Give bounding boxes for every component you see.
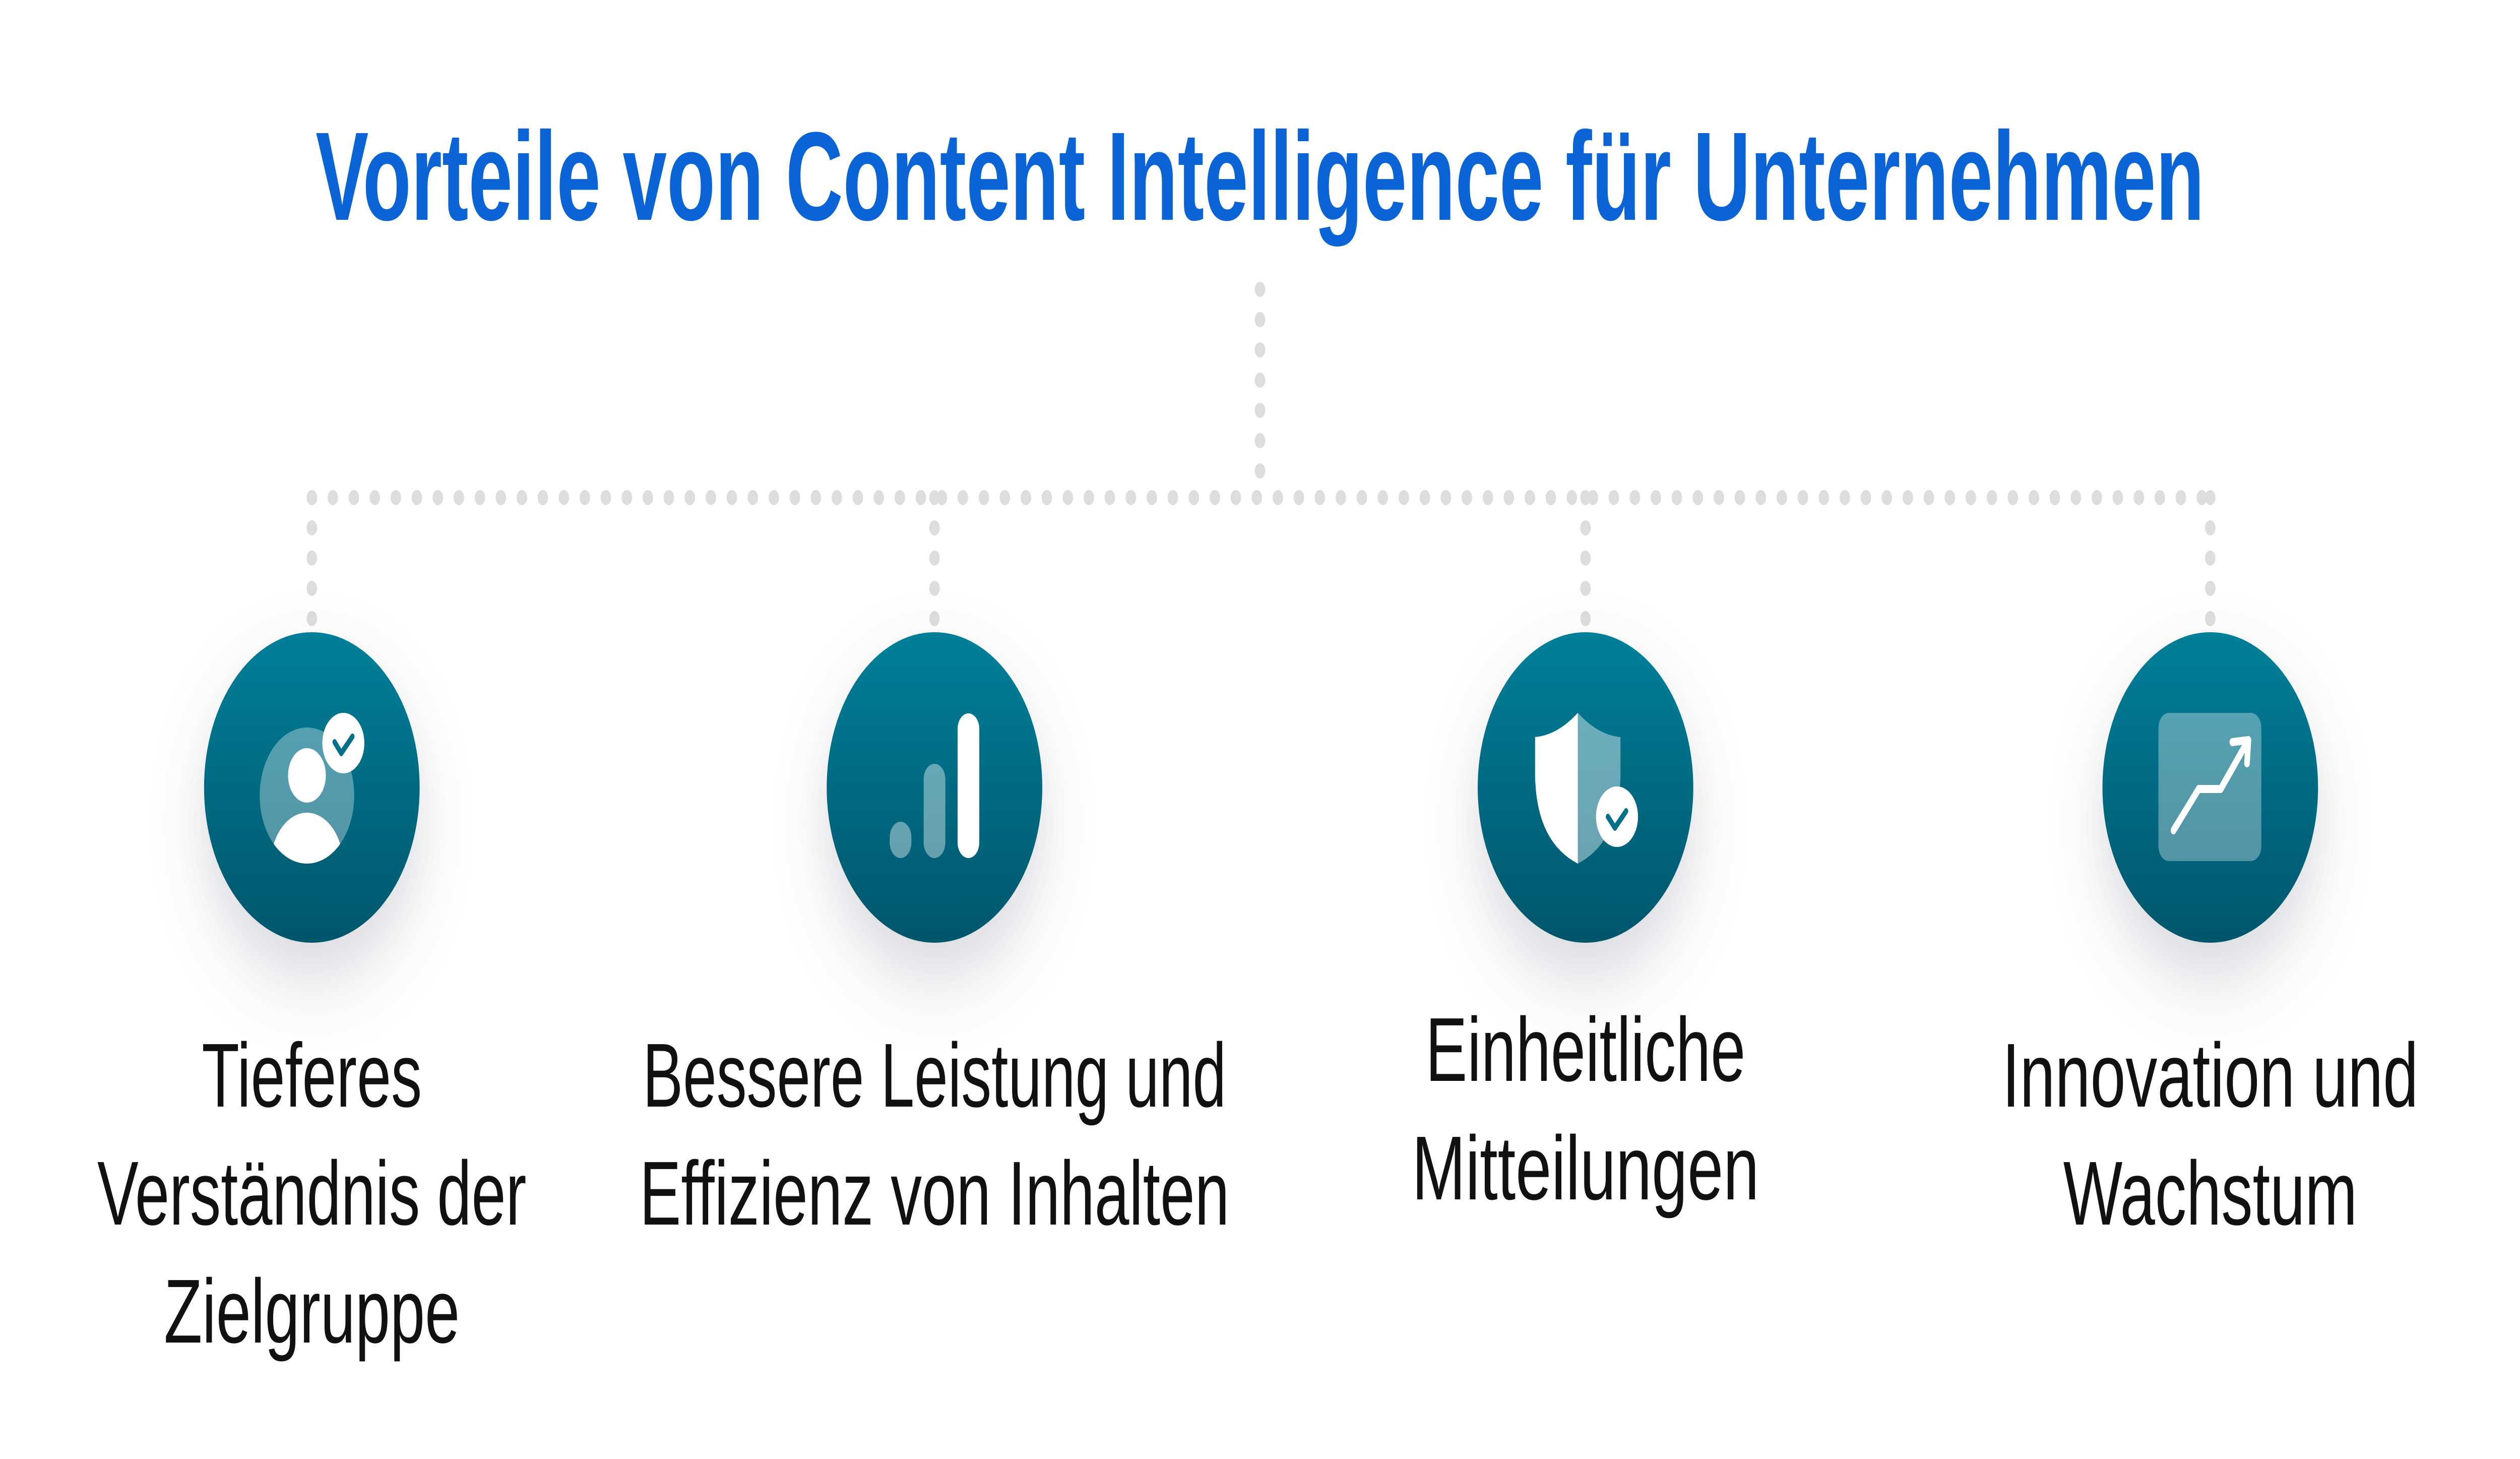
label: Einheitliche Mitteilungen: Mitteilungen bbox=[1412, 1117, 1759, 1219]
icon: audience circle bbox=[204, 632, 420, 943]
label: Bessere Leistung und Effizienz von Inhalten bbox=[640, 1024, 1229, 1244]
label: Tieferes Verständnis der Zielgruppe: Zielgruppe bbox=[164, 1260, 460, 1362]
label: Tieferes Verständnis der Zielgruppe bbox=[97, 1024, 526, 1362]
icon: shield circle bbox=[1478, 632, 1693, 943]
icon: performance bars circle bbox=[827, 632, 1042, 943]
label: Tieferes Verständnis der Zielgruppe: Tieferes bbox=[202, 1024, 422, 1126]
connector: dotted tree lines bbox=[312, 289, 2210, 630]
label: Bessere Leistung und Effizienz von Inhalten: Effizienz von Inhalten bbox=[640, 1142, 1229, 1244]
title: Vorteile von Content Intelligence für Unternehmen bbox=[316, 105, 2204, 247]
label: Tieferes Verständnis der Zielgruppe: Verständnis der bbox=[97, 1142, 526, 1244]
label: Innovation und Wachstum: Innovation und bbox=[2002, 1024, 2418, 1126]
label: Einheitliche Mitteilungen bbox=[1412, 999, 1759, 1219]
icon: growth chart circle bbox=[2103, 632, 2318, 943]
label: Bessere Leistung und Effizienz von Inhalten: Bessere Leistung und bbox=[643, 1024, 1226, 1126]
label: Innovation und Wachstum bbox=[2002, 1024, 2418, 1244]
label: Einheitliche Mitteilungen: Einheitliche bbox=[1425, 999, 1745, 1100]
label: Innovation und Wachstum: Wachstum bbox=[2063, 1142, 2357, 1244]
